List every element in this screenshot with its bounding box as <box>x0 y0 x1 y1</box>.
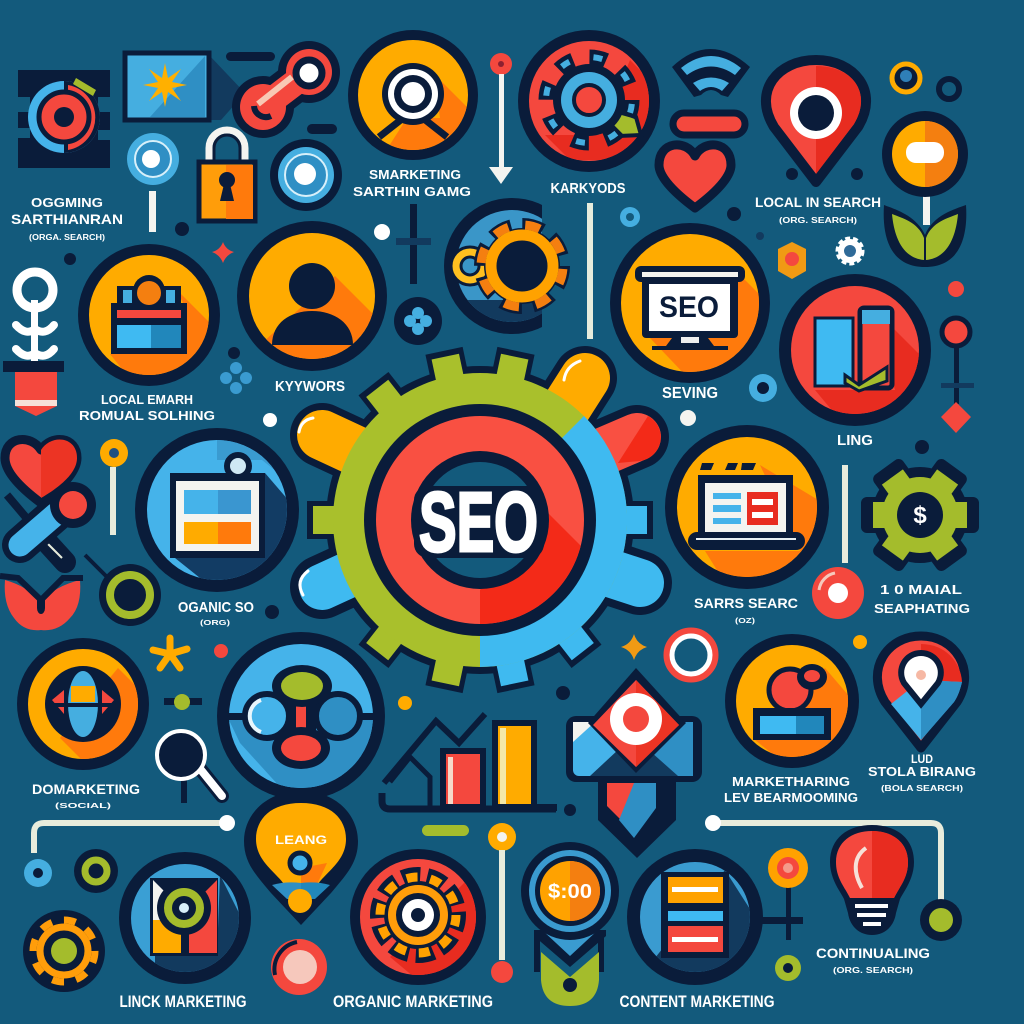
icon: coin with leaf: $:00 <box>548 881 592 903</box>
label: local search: LOCAL EMARH <box>101 392 193 407</box>
icon: green pill <box>422 825 469 836</box>
label: keywords: KYYWORS <box>275 378 345 395</box>
gear teeth outlines <box>307 347 653 693</box>
label: local search: ROMUAL SOLHING <box>79 408 215 423</box>
icon: blue card circle <box>135 428 299 592</box>
icon: red lightbulb <box>830 825 914 935</box>
label: organic: SARTHIANRAN <box>11 211 123 227</box>
label: marketing <box>724 774 858 805</box>
icon: red button <box>271 939 327 995</box>
label: domain marketing: DOMARKETING <box>32 781 140 797</box>
icon: green dollar gear <box>842 457 979 573</box>
icon: red gear circle <box>518 30 660 172</box>
icon: heart and crossed pin <box>5 440 96 562</box>
label: search <box>694 595 798 625</box>
icon: orange asterisk <box>153 638 187 668</box>
label: store: (BOLA SEARCH) <box>881 784 963 793</box>
icon: orange hexagon badge <box>778 242 806 279</box>
label: learn: LEANG <box>275 833 327 847</box>
icon: gear in blue circle <box>444 198 580 334</box>
icon: connector line left <box>24 815 235 893</box>
label: search: SARRS SEARC <box>694 595 798 611</box>
icon: line with orange pin <box>100 439 128 535</box>
icon: top-left target gear <box>18 70 110 168</box>
icon: rings <box>892 64 959 99</box>
icon: red leaf <box>0 576 83 630</box>
label: marketing: MARKETHARING <box>732 774 850 789</box>
label: search: (OZ) <box>735 618 755 625</box>
label: continuing <box>816 945 930 975</box>
icon: laptop circle <box>665 425 829 591</box>
icon: globe circle <box>17 638 149 770</box>
icon: small map pin <box>877 636 965 748</box>
icon: SEO monitor circle <box>610 223 770 383</box>
icon: orange magnifier circle <box>348 30 480 160</box>
label: ling: LING <box>837 432 873 449</box>
label: local search <box>79 392 215 423</box>
label: continuing: (ORG. SEARCH) <box>833 966 913 975</box>
icon: green node <box>164 694 202 710</box>
label: content marketing: CONTENT MARKETING <box>620 992 774 1011</box>
icon: wifi arcs <box>672 49 750 97</box>
icon: small blue flower <box>220 362 252 394</box>
icon: envelope with target <box>566 668 702 858</box>
icon: orange pin and line <box>488 823 516 983</box>
label: marketing: LEV BEARMOOMING <box>724 790 858 805</box>
label: local in search: (ORG. SEARCH) <box>779 216 857 225</box>
label: organic: (ORGA. SEARCH) <box>29 233 105 242</box>
label: seaphating: SEAPHATING <box>874 601 970 616</box>
icon: arrow down <box>489 53 513 184</box>
label: searching <box>353 167 471 199</box>
icon: orange circle with heart <box>725 634 859 768</box>
label: local in search <box>755 194 881 225</box>
icon: flower dot <box>394 297 442 345</box>
icon: content list circle <box>627 849 803 985</box>
icon: red gear circle bottom <box>350 849 490 985</box>
label: serving: SEVING <box>662 385 718 402</box>
label: organic <box>11 195 123 242</box>
SEO title: SEO <box>419 475 538 569</box>
icon: padlock <box>199 130 255 221</box>
gear teeth green <box>313 354 528 686</box>
icon: gear small bottom left <box>23 910 105 992</box>
icon: plant sign <box>3 272 64 416</box>
icon: node orange and green <box>768 848 808 981</box>
label: seaphating: 1 0 MAIAL <box>880 582 962 597</box>
icon: blue lens <box>127 133 179 232</box>
label: seaphating <box>874 582 970 616</box>
label: organic seo <box>178 599 254 627</box>
icon: blue circle with target book <box>119 852 251 984</box>
icon: red documents circle <box>779 274 931 426</box>
label: store: LUD <box>911 752 933 766</box>
label: keywords 2: KARKYODS <box>550 180 626 197</box>
icon: orange bulb and leaves <box>882 111 968 267</box>
small decorative dots <box>64 168 964 619</box>
icon: green dollar gear: $ <box>913 502 927 529</box>
label: link marketing: LINCK MARKETING <box>120 992 246 1011</box>
label: organic seo: OGANIC SO <box>178 599 254 616</box>
label: continuing: CONTINUALING <box>816 945 930 961</box>
icon: orange diamond <box>621 634 647 660</box>
icon: blue dumbbell circle <box>217 632 385 800</box>
icon: chain link <box>232 41 340 138</box>
icon: red pill <box>673 113 745 135</box>
label: searching: SMARKETING <box>369 167 461 182</box>
gear side lobes <box>299 361 661 595</box>
label: local in search: LOCAL IN SEARCH <box>755 194 881 210</box>
label: organic marketing: ORGANIC MARKETING <box>333 992 493 1011</box>
label: store: STOLA BIRANG <box>868 764 976 779</box>
label: domain marketing <box>32 781 140 810</box>
icon: SEO monitor circle: SEO <box>659 291 719 324</box>
icon: connector line right <box>705 815 962 941</box>
icon: ring red <box>668 632 714 678</box>
icon: chart with mountain <box>382 696 557 811</box>
icon: magnifier <box>157 731 222 803</box>
gear teeth blue <box>494 506 647 686</box>
icon: orange tag circle <box>78 244 220 386</box>
icon: location pin <box>766 60 866 182</box>
icon: user circle <box>237 221 387 371</box>
icon: heart <box>659 145 731 208</box>
icon: red ball <box>812 567 864 619</box>
icon: orange lightbulb badge <box>244 791 358 925</box>
label: store <box>868 752 976 793</box>
label: domain marketing: (SOCIAL) <box>55 803 111 810</box>
label: organic seo: (ORG) <box>200 620 230 627</box>
icon: green ring <box>85 555 161 626</box>
icon: blue ring button <box>270 139 342 211</box>
central SEO gear <box>299 347 661 693</box>
label: searching: SARTHIN GAMG <box>353 184 471 199</box>
icon: pin line with diamond <box>941 318 974 433</box>
icon: image card with sun <box>125 53 245 120</box>
icon: white gear small <box>837 238 863 264</box>
label: organic: OGGMING <box>31 195 103 210</box>
icon: coin with leaf <box>521 842 619 1006</box>
